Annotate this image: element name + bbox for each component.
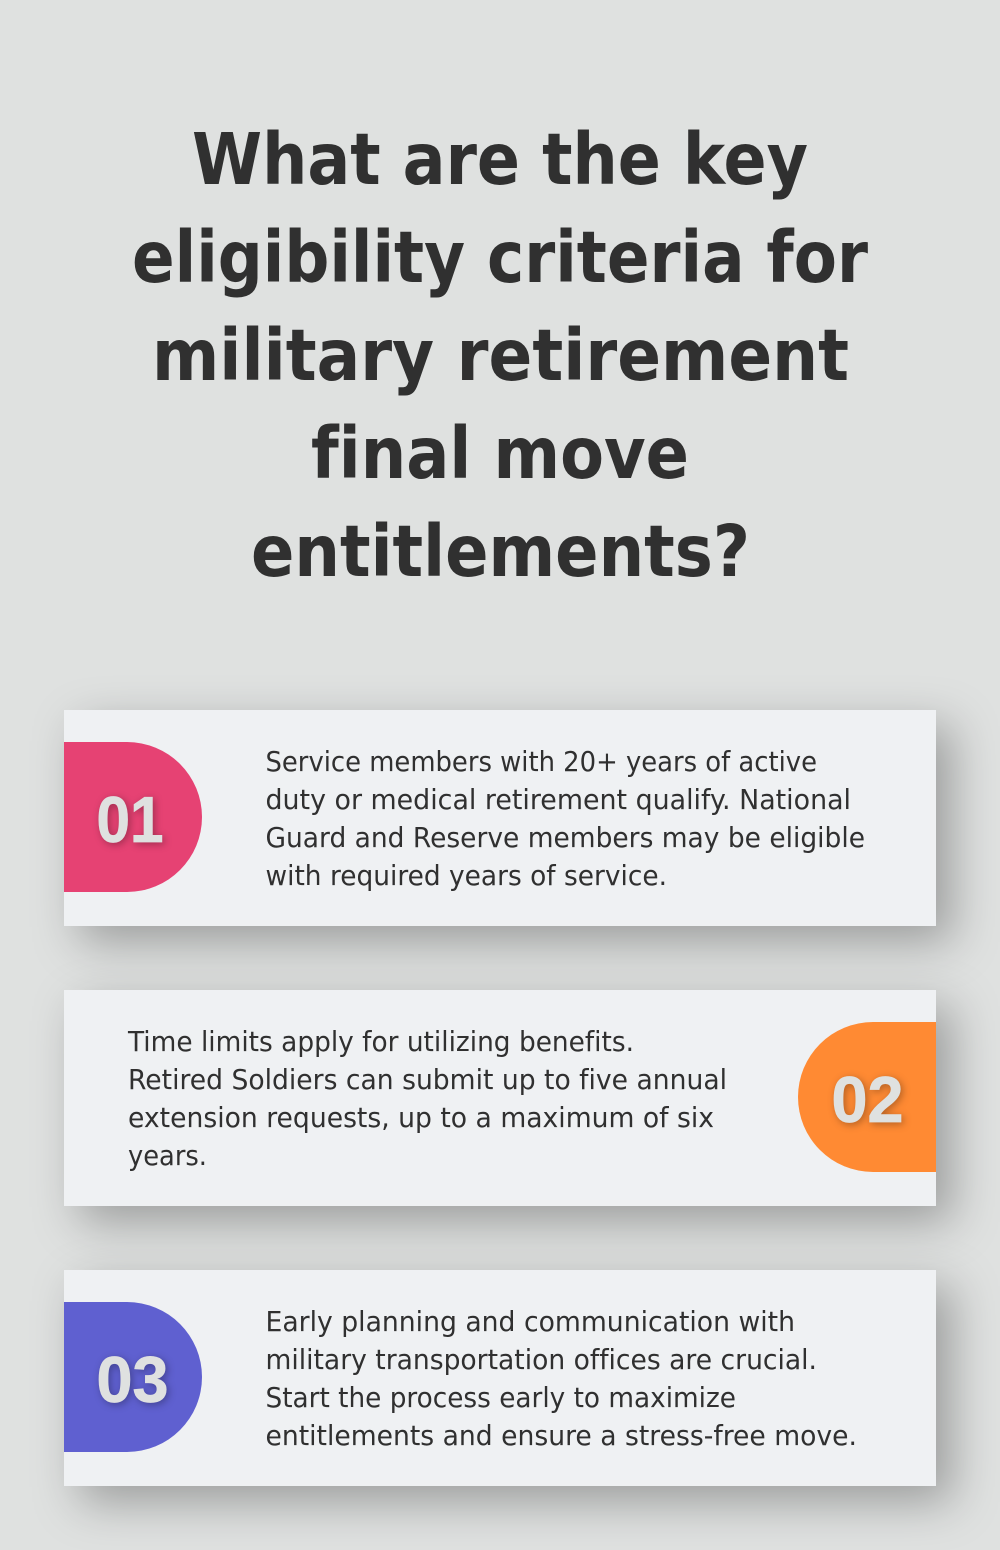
title: entitlements? <box>251 510 750 593</box>
badge: 03: 03 <box>96 1343 168 1416</box>
text: step 02 description: years. <box>128 1139 207 1172</box>
panel: step 02 <box>64 990 936 1206</box>
text: step 03 description: Start the process early to maximize <box>266 1381 736 1414</box>
text: step 03 description <box>266 1305 857 1452</box>
text: step 01 description <box>266 745 865 892</box>
title: final move <box>311 412 689 495</box>
badge: 03 <box>64 1302 202 1452</box>
title: What are the key <box>192 118 808 201</box>
badge: 02: 02 <box>832 1063 904 1136</box>
badge: 01: 01 <box>96 783 164 856</box>
badge: 01 <box>64 742 202 892</box>
title: military retirement <box>152 314 849 397</box>
text: step 02 description: Time limits apply for utilizing benefits. <box>127 1025 634 1058</box>
text: step 03 description: military transportation offices are crucial. <box>266 1343 817 1376</box>
text: step 03 description: entitlements and ensure a stress-free move. <box>266 1419 857 1452</box>
title <box>132 118 868 593</box>
title: eligibility criteria for <box>132 216 868 299</box>
panel: step 01 <box>64 710 936 926</box>
text: step 03 description: Early planning and communication with <box>266 1305 795 1338</box>
text: step 02 description <box>127 1025 727 1172</box>
text: step 01 description: with required years of service. <box>266 859 667 892</box>
badge: 02 <box>798 1022 936 1172</box>
panel: step 03 <box>64 1270 936 1486</box>
text: step 02 description: extension requests, up to a maximum of six <box>128 1101 714 1134</box>
text: step 02 description: Retired Soldiers can submit up to five annual <box>128 1063 727 1096</box>
text: step 01 description: Service members with 20+ years of active <box>266 745 817 778</box>
text: step 01 description: Guard and Reserve members may be eligible <box>266 821 865 854</box>
text: step 01 description: duty or medical retirement qualify. National <box>266 783 851 816</box>
